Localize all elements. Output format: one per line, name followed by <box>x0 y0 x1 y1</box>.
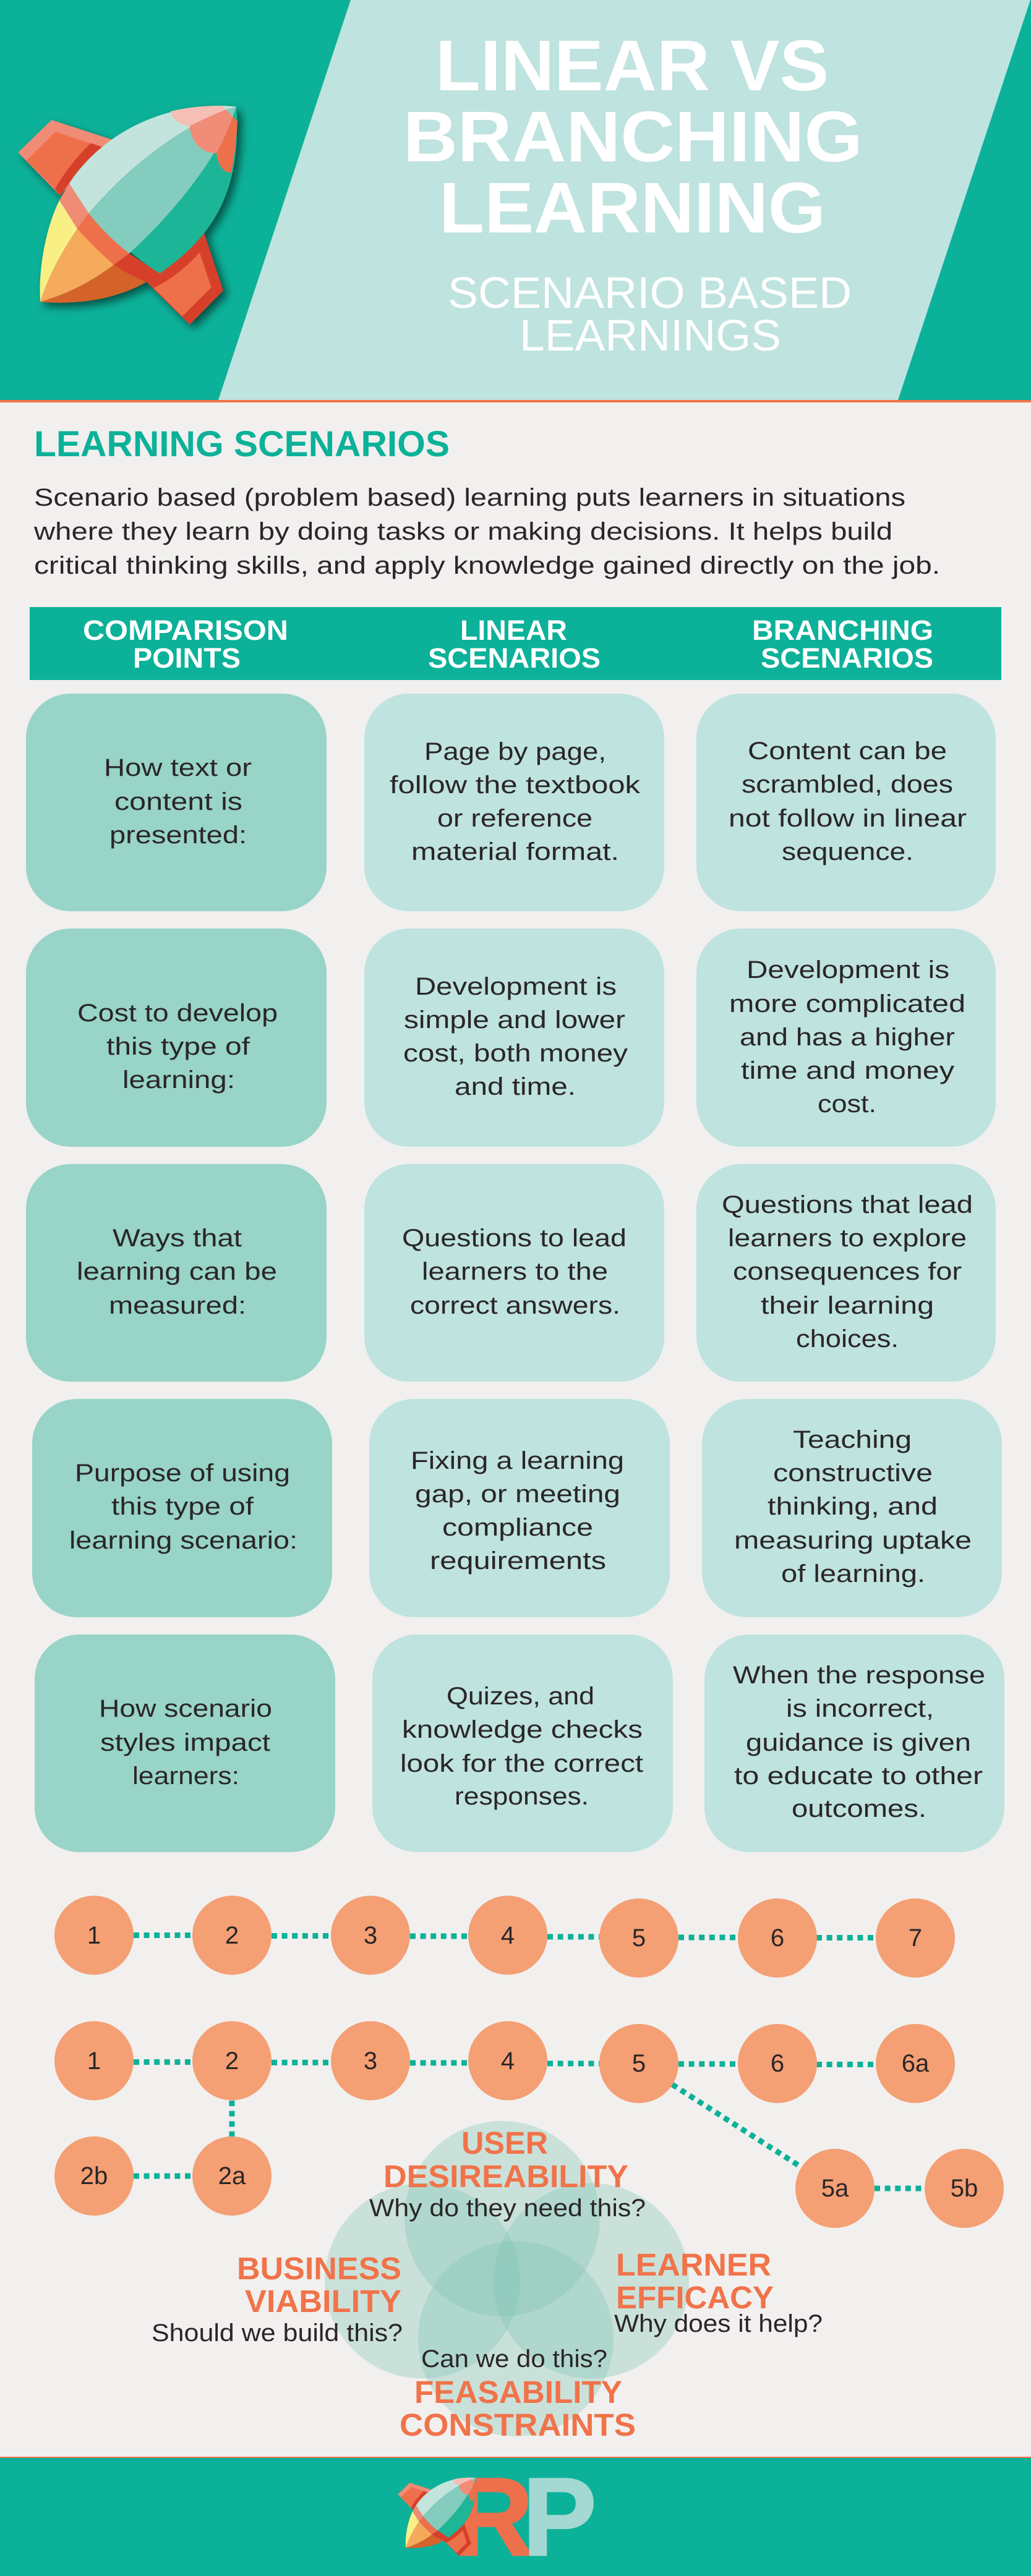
row 2: branching card: time and money <box>741 1057 954 1084</box>
row 4: linear card: requirements <box>430 1547 606 1575</box>
diagram: branching sequence: 5a <box>821 2175 849 2202</box>
row 3: linear card: learners to the <box>422 1258 608 1285</box>
header banner <box>0 0 1031 402</box>
venn label: business viability: VIABILITY <box>245 2284 401 2319</box>
row 4: branching card: measuring uptake <box>734 1527 972 1554</box>
diagram: linear sequence: 3 <box>364 1922 377 1949</box>
row 5: linear card: Quizes, and <box>447 1683 594 1710</box>
column heading: comparison points: COMPARISON <box>83 614 288 646</box>
row 4: branching card <box>702 1399 1002 1617</box>
diagram: linear sequence: 7 <box>909 1924 922 1952</box>
row 2: linear card: simple and lower <box>404 1006 625 1034</box>
row 1: branching card: Content can be <box>748 738 947 765</box>
row 3: linear card: Questions to lead <box>402 1225 627 1252</box>
row 5: linear card: look for the correct <box>400 1750 643 1777</box>
row 2: linear card: cost, both money <box>403 1040 628 1067</box>
column heading: branching scenarios: BRANCHING <box>752 614 933 646</box>
venn label: business viability: BUSINESS <box>237 2251 401 2286</box>
row 5: branching card: is incorrect, <box>786 1695 934 1722</box>
row 5: branching card: When the response <box>733 1662 985 1689</box>
diagram: branching sequence: 3 <box>364 2047 377 2075</box>
row 3: comparison card: measured: <box>109 1292 246 1319</box>
row 4: comparison card: this type of <box>111 1493 254 1520</box>
row 5: comparison card: learners: <box>132 1762 239 1790</box>
diagram: branching sequence: 2 <box>225 2047 239 2075</box>
diagram: linear sequence: 5 <box>632 1924 646 1952</box>
diagram: linear sequence: 1 <box>87 1922 101 1949</box>
diagram: branching sequence: 2b <box>80 2162 108 2190</box>
row 1: linear card: or reference <box>437 805 593 832</box>
row 1: branching card: scrambled, does <box>742 771 953 798</box>
subtitle <box>448 269 852 360</box>
row 4: branching card: thinking, and <box>768 1493 938 1520</box>
row 4: linear card <box>369 1399 670 1617</box>
diagram: branching sequence: 5 <box>632 2050 646 2077</box>
row 4: branching card: Teaching <box>793 1426 912 1453</box>
venn label: user desireability: USER <box>461 2125 548 2161</box>
diagram: linear sequence: 6 <box>771 1924 784 1952</box>
row 5: linear card <box>372 1634 673 1852</box>
row 1: linear card: follow the textbook <box>390 772 641 799</box>
row 5: comparison card: styles impact <box>100 1729 270 1756</box>
row 1: comparison card: content is <box>114 788 242 815</box>
row 3: branching card: learners to explore <box>728 1225 967 1252</box>
diagram: linear sequence: 4 <box>501 1922 515 1949</box>
row 4: linear card: Fixing a learning <box>411 1447 624 1474</box>
venn label: feasability constraints: FEASABILITY <box>414 2374 622 2410</box>
row 2: linear card <box>364 929 664 1147</box>
venn label: feasability constraints <box>400 2345 636 2442</box>
diagram: branching sequence: 6 <box>771 2050 784 2077</box>
row 5: linear card: knowledge checks <box>402 1716 643 1743</box>
row 4: branching card: constructive <box>773 1460 933 1487</box>
row 3: linear card: correct answers. <box>410 1292 620 1319</box>
row 2: branching card: cost. <box>818 1090 876 1118</box>
heading: learning scenarios: LEARNING SCENARIOS <box>34 424 450 464</box>
venn label: learner efficacy: EFFICACY <box>616 2280 774 2315</box>
intro text: Scenario based (problem based) learning puts learners in situations <box>34 484 905 511</box>
row 1: branching card <box>696 694 996 911</box>
row 5: branching card <box>704 1634 1004 1852</box>
row 2: branching card: and has a higher <box>740 1024 955 1051</box>
venn label: feasability constraints: Can we do this? <box>421 2345 607 2373</box>
icon: rocket <box>18 106 237 325</box>
column heading: linear scenarios: SCENARIOS <box>428 642 601 674</box>
table header bar <box>30 607 1001 680</box>
footer logo: R <box>453 2455 533 2576</box>
row 3: comparison card: Ways that <box>113 1225 242 1252</box>
row 4: comparison card: learning scenario: <box>69 1527 297 1554</box>
subtitle: LEARNINGS <box>520 312 781 360</box>
row 2: comparison card: this type of <box>106 1033 250 1060</box>
venn diagram <box>152 2121 823 2442</box>
row 3: branching card: their learning <box>761 1292 934 1319</box>
row 5: linear card: responses. <box>455 1783 589 1810</box>
intro text: critical thinking skills, and apply knowledge gained directly on the job. <box>34 552 940 579</box>
row 1: linear card: Page by page, <box>424 738 606 765</box>
diagram: branching sequence: 2a <box>218 2162 246 2190</box>
footer band <box>0 2457 1031 2576</box>
venn label: business viability: Should we build this? <box>152 2319 403 2347</box>
row 5: branching card: outcomes. <box>792 1795 926 1822</box>
row 1: comparison card <box>26 694 327 911</box>
diagram: linear sequence: 2 <box>225 1922 239 1949</box>
venn label: feasability constraints: CONSTRAINTS <box>400 2407 636 2442</box>
row 3: branching card <box>696 1164 996 1382</box>
row 4: branching card: of learning. <box>781 1560 925 1588</box>
venn label: learner efficacy: Why does it help? <box>614 2310 823 2337</box>
diagram: branching sequence: 4 <box>501 2047 515 2075</box>
row 3: comparison card <box>26 1164 327 1382</box>
row 4: comparison card: Purpose of using <box>75 1460 290 1487</box>
row 4: comparison card <box>32 1399 332 1617</box>
diagram: branching sequence: 6a <box>902 2050 930 2077</box>
row 4: linear card: compliance <box>442 1514 593 1541</box>
venn label: learner efficacy <box>614 2247 823 2337</box>
row 2: branching card: more complicated <box>729 990 965 1018</box>
venn label: learner efficacy: LEARNER <box>616 2247 771 2282</box>
row 3: comparison card: learning can be <box>77 1258 277 1285</box>
diagram: branching sequence: 5b <box>951 2175 978 2202</box>
diagram: linear sequence <box>54 1895 955 1978</box>
row 3: branching card: choices. <box>796 1325 899 1353</box>
row 2: branching card <box>696 929 996 1147</box>
footer logo: P <box>523 2455 596 2576</box>
row 5: comparison card: How scenario <box>99 1695 272 1722</box>
column heading: branching scenarios <box>752 614 933 674</box>
row 5: branching card: guidance is given <box>746 1729 971 1756</box>
title: LEARNING <box>439 168 826 248</box>
row 2: linear card: Development is <box>415 973 617 1000</box>
row 2: comparison card <box>26 929 327 1147</box>
column heading: linear scenarios: LINEAR <box>460 614 567 646</box>
row 2: comparison card: Cost to develop <box>77 1000 278 1027</box>
row 1: comparison card: How text or <box>104 754 252 781</box>
venn label: user desireability: DESIREABILITY <box>383 2159 628 2194</box>
row 1: linear card <box>364 694 664 911</box>
column heading: linear scenarios <box>428 614 601 674</box>
title: LINEAR VS <box>435 25 829 106</box>
title <box>403 25 863 248</box>
row 4: linear card: gap, or meeting <box>415 1481 620 1508</box>
row 1: comparison card: presented: <box>109 822 247 849</box>
row 3: linear card <box>364 1164 664 1382</box>
diagram: branching sequence: 1 <box>87 2047 101 2075</box>
venn label: user desireability: Why do they need this? <box>369 2195 646 2222</box>
row 1: linear card: material format. <box>411 838 619 865</box>
column heading: branching scenarios: SCENARIOS <box>761 642 933 674</box>
venn label: user desireability <box>369 2125 646 2222</box>
diagram: branching sequence <box>54 2021 1004 2228</box>
subtitle: SCENARIO BASED <box>448 269 852 318</box>
row 5: comparison card <box>35 1634 335 1852</box>
row 2: comparison card: learning: <box>122 1066 235 1094</box>
intro text <box>33 484 940 579</box>
footer logo <box>398 2455 596 2576</box>
title: BRANCHING <box>403 96 863 177</box>
intro text: where they learn by doing tasks or making decisions. It helps build <box>33 518 892 545</box>
row 3: branching card: consequences for <box>733 1258 962 1285</box>
row 1: branching card: not follow in linear <box>729 805 967 832</box>
row 2: linear card: and time. <box>455 1073 576 1100</box>
venn label: business viability <box>152 2251 403 2347</box>
column heading: comparison points: POINTS <box>133 642 241 674</box>
row 2: branching card: Development is <box>747 956 949 984</box>
row 1: branching card: sequence. <box>782 838 913 865</box>
column heading: comparison points <box>83 614 288 674</box>
row 3: branching card: Questions that lead <box>722 1191 973 1218</box>
row 5: branching card: to educate to other <box>734 1762 983 1790</box>
